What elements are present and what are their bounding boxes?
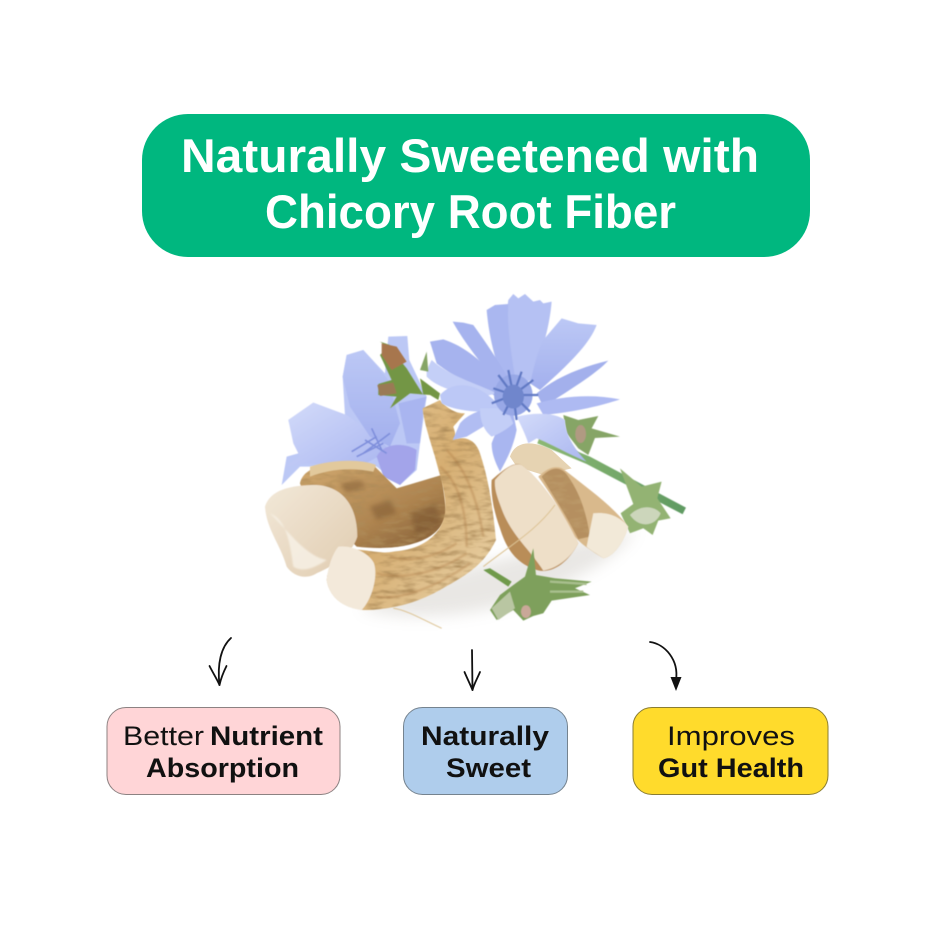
left flower — [282, 336, 427, 485]
card label line 1 regular: Better — [123, 721, 204, 751]
underlay — [282, 336, 427, 485]
main flower — [427, 294, 620, 472]
stem and buds behind — [483, 415, 686, 587]
ridges — [377, 450, 483, 597]
card label line 2: Sweet — [446, 753, 531, 783]
card label line 1: Naturally — [421, 721, 549, 751]
cut end — [265, 485, 357, 577]
banner pill — [142, 114, 810, 257]
root body — [327, 400, 496, 610]
root hair — [483, 505, 555, 567]
cut root slices — [483, 464, 628, 571]
card: better nutrient absorption — [107, 708, 340, 794]
root skin — [300, 464, 447, 548]
flower centre — [494, 374, 533, 416]
left petals — [430, 339, 508, 397]
title banner — [142, 114, 810, 257]
left flower filaments — [352, 428, 390, 457]
left root — [265, 461, 447, 577]
arrow: to improves gut health — [650, 642, 682, 691]
lower petals — [453, 408, 488, 440]
bottom stem — [483, 568, 512, 587]
right bud lower — [620, 468, 671, 535]
slice two — [538, 467, 628, 558]
illustration: chicory root and flowers — [265, 294, 686, 628]
brown flecks — [340, 480, 440, 537]
back slice — [510, 443, 572, 475]
card background — [107, 708, 340, 794]
card label line 2: Absorption — [146, 753, 299, 783]
card background — [404, 708, 568, 794]
arrow: to naturally sweet — [464, 650, 480, 690]
top petals — [507, 294, 552, 387]
title line 1: Naturally Sweetened with — [181, 129, 759, 182]
bottom bud — [490, 548, 592, 621]
root hair — [393, 608, 442, 628]
curved centre root — [327, 400, 496, 628]
card label line 2: Gut Health — [658, 753, 804, 783]
card: improves gut health — [633, 708, 828, 794]
card background — [633, 708, 828, 794]
arrow: to better nutrient absorption — [210, 638, 231, 685]
title line 2: Chicory Root Fiber — [265, 185, 676, 238]
top green bud — [377, 342, 440, 408]
side petals — [537, 361, 608, 407]
upper-right bud — [563, 415, 620, 455]
cut end — [327, 546, 375, 610]
card: naturally sweet — [404, 708, 568, 794]
main stem — [537, 436, 686, 514]
ground shadow — [360, 530, 637, 616]
card label line 1 bold: Nutrient — [210, 721, 323, 751]
card label line 1: Improves — [667, 721, 795, 751]
slice one — [491, 464, 578, 571]
